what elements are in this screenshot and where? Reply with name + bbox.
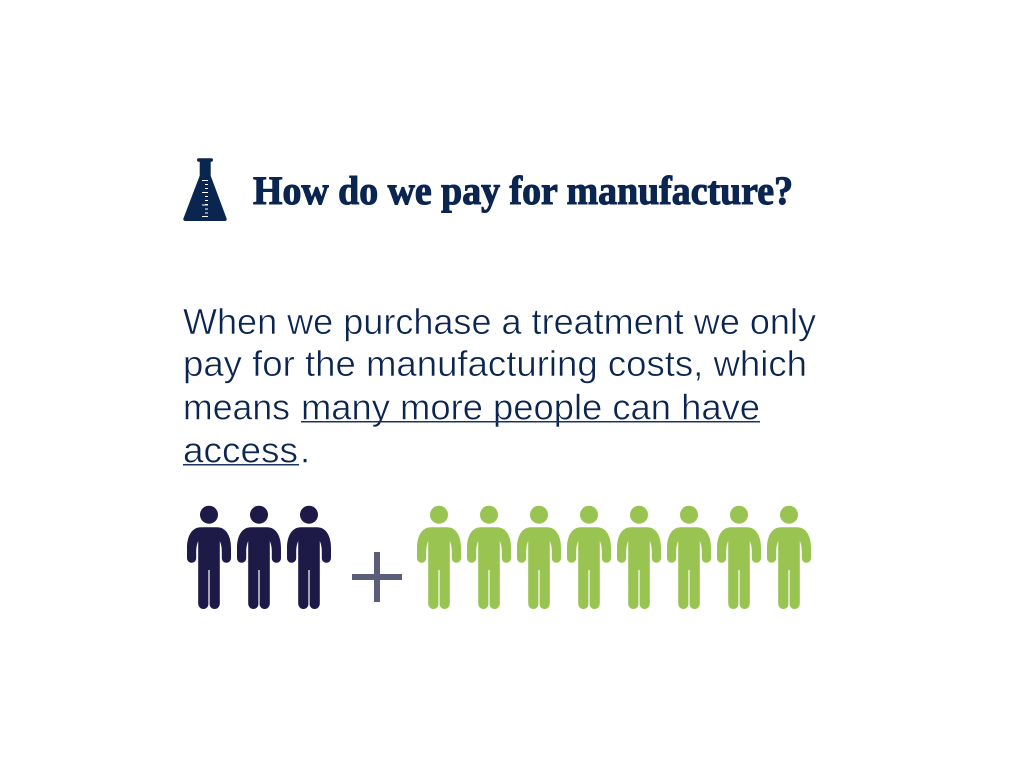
plus sign <box>352 552 402 602</box>
body text: When we purchase a treatment we only <box>183 301 817 342</box>
people: navy group of three <box>187 506 331 609</box>
body text: means <box>183 386 290 428</box>
body text: access <box>183 430 298 470</box>
people: green group of eight <box>417 506 811 609</box>
heading: How do we pay for manufacture? <box>253 168 793 213</box>
body text: pay for the manufacturing costs, which <box>183 343 807 384</box>
body text: . <box>300 430 310 470</box>
icon: flask <box>183 158 227 221</box>
body text <box>183 301 817 470</box>
body text: many more people can have <box>301 386 760 428</box>
